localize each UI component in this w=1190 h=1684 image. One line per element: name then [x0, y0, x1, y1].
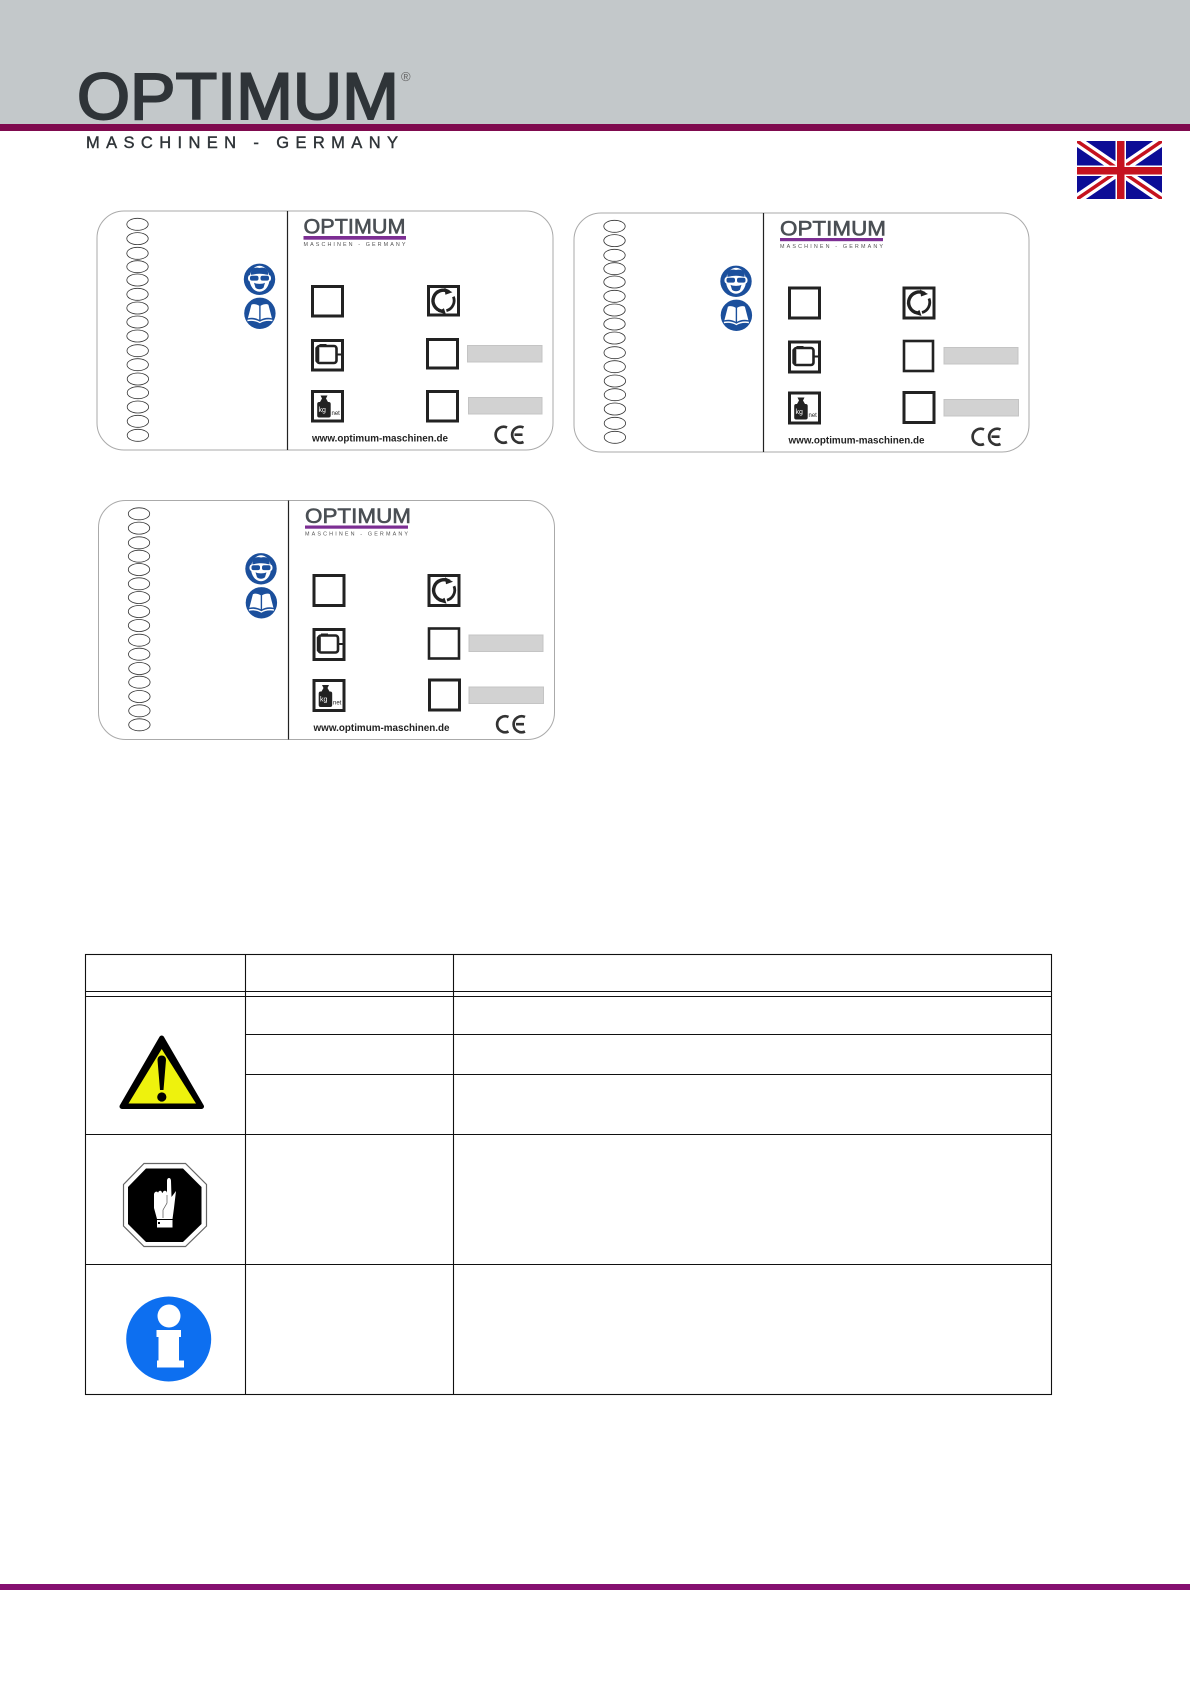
- panel: machine nameplate 3: OPTIMUM: [305, 505, 411, 528]
- panel: machine nameplate 2: OPTIMUM: [780, 218, 886, 240]
- panel: machine nameplate 1: www.optimum-maschinen.de: [311, 434, 448, 444]
- panel: machine nameplate 2: MASCHINEN - GERMANY: [780, 244, 883, 250]
- panel: machine nameplate 2: net: [808, 413, 817, 419]
- panel: machine nameplate 3: kg: [320, 696, 328, 704]
- icon: stop hand octagon: [124, 1164, 206, 1246]
- panel: machine nameplate 3: [98, 500, 554, 740]
- icon: warning triangle: [122, 1038, 202, 1106]
- panel: machine nameplate 1: kg: [318, 407, 326, 414]
- panel: machine nameplate 1: OPTIMUM: [304, 216, 406, 238]
- icon: information circle: [126, 1296, 211, 1382]
- panel: machine nameplate 3: net: [333, 700, 342, 706]
- panel: machine nameplate 2: [574, 213, 1029, 452]
- panel: machine nameplate 3: www.optimum-maschinen.de: [313, 723, 450, 734]
- panel: machine nameplate 2: kg: [796, 409, 803, 416]
- panel: machine nameplate 1: [97, 211, 553, 450]
- footer purple rule: [0, 1584, 1190, 1590]
- main logo: ®: [401, 69, 411, 84]
- main logo: MASCHINEN - GERMANY: [86, 134, 398, 152]
- header purple rule: [0, 124, 1190, 131]
- panel: machine nameplate 1: net: [332, 411, 340, 417]
- header grey band: [0, 0, 1190, 124]
- main logo: OPTIMUM: [77, 59, 399, 133]
- icon: UK flag: [1077, 141, 1162, 199]
- panel: machine nameplate 1: MASCHINEN - GERMANY: [304, 242, 406, 248]
- panel: machine nameplate 3: MASCHINEN - GERMANY: [305, 532, 408, 538]
- panel: machine nameplate 2: www.optimum-maschinen.de: [788, 436, 925, 446]
- table: warning symbols: [86, 954, 1052, 1394]
